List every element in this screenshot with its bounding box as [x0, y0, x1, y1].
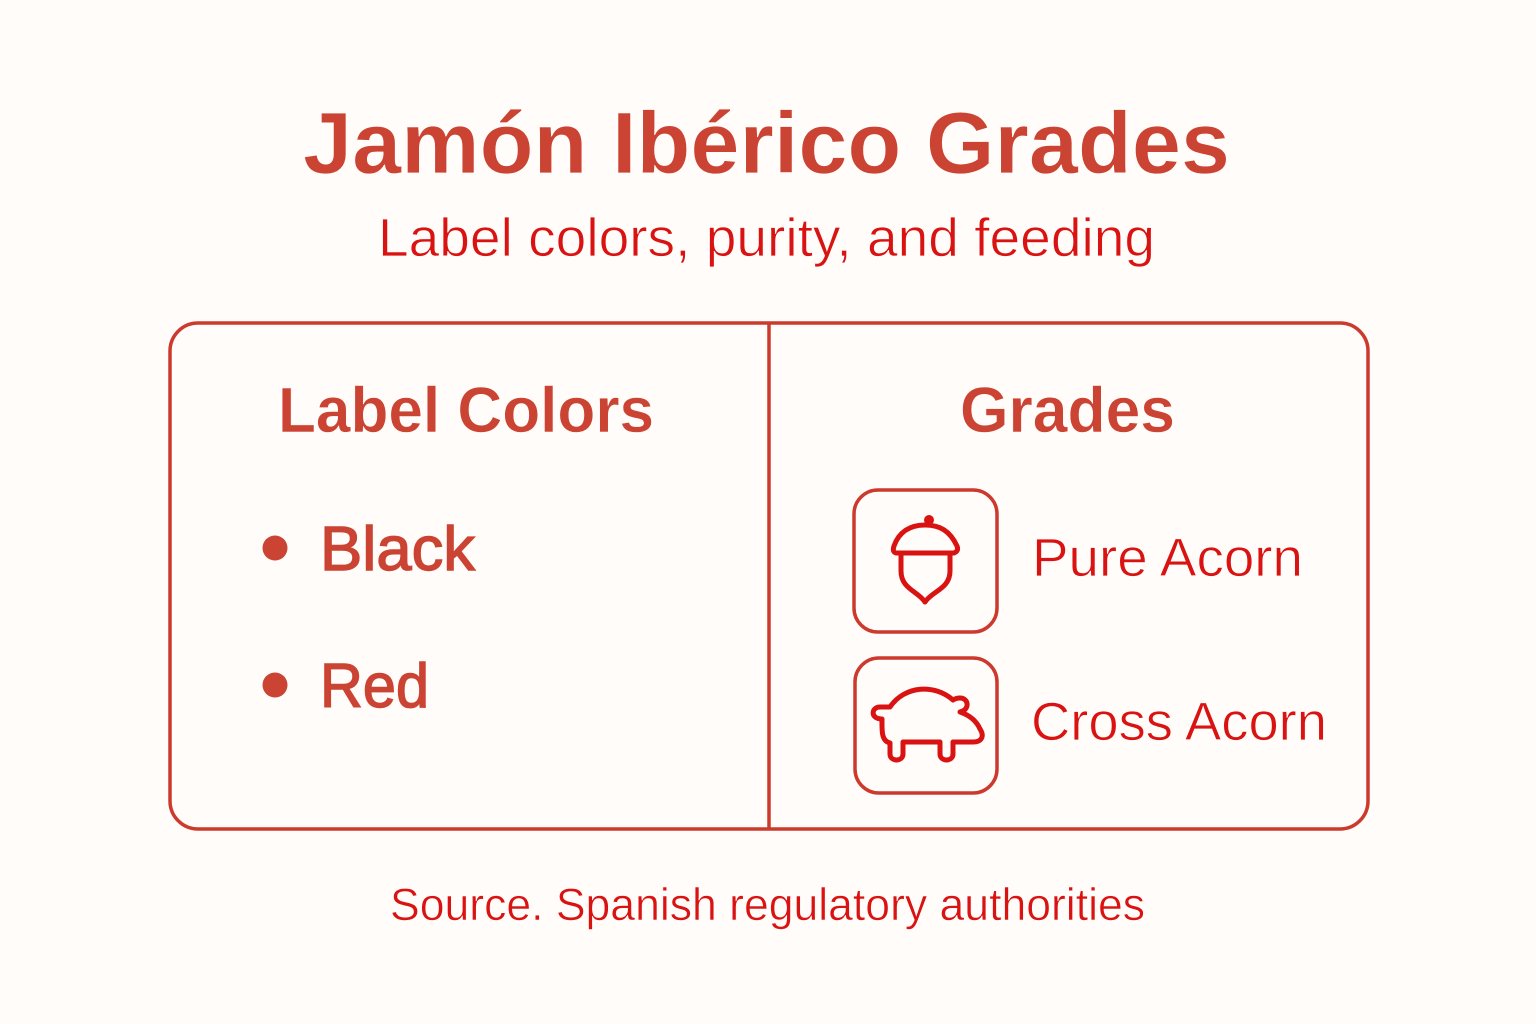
label: cross acorn: Cross Acorn: [1031, 692, 1327, 752]
list item: red: Red: [320, 652, 429, 721]
list item: black: Black: [320, 515, 476, 584]
title: Jamón Ibérico Grades: [303, 95, 1230, 192]
label: pure acorn: Pure Acorn: [1032, 528, 1303, 588]
heading: label colors: Label Colors: [278, 374, 654, 446]
list item: red: [262, 652, 429, 721]
icon: acorn: [854, 490, 997, 632]
heading: grades: Grades: [960, 374, 1175, 446]
icon: pig: [855, 658, 997, 793]
panel: label colors: [262, 374, 654, 721]
source note: Source. Spanish regulatory authorities: [390, 879, 1145, 930]
subtitle: Label colors, purity, and feeding: [378, 208, 1155, 268]
panel: grades: [854, 374, 1327, 793]
panel: outer table frame: [170, 323, 1368, 829]
